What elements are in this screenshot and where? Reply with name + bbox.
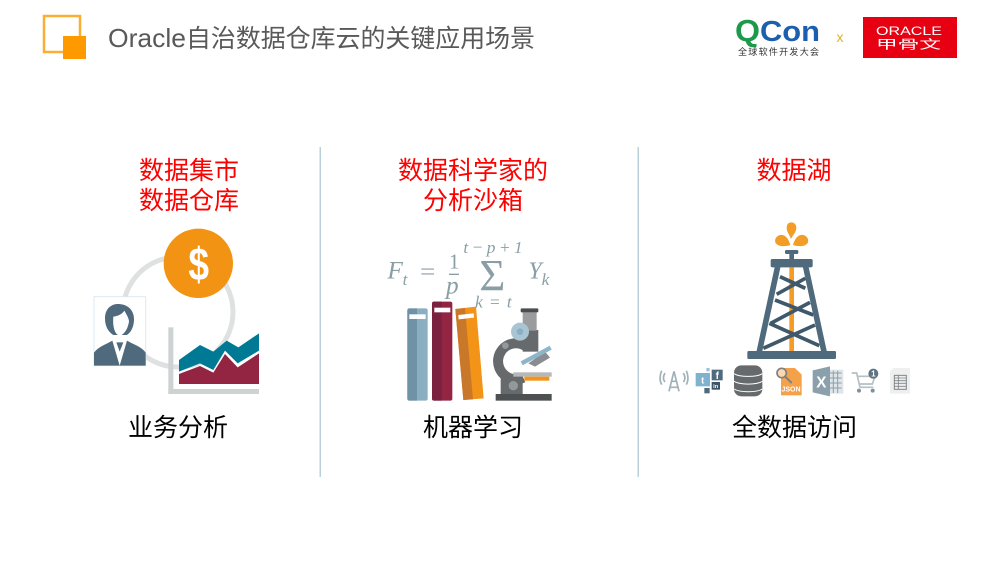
divider: [638, 147, 639, 477]
icon: signal tower: [660, 371, 688, 391]
coin: $: [188, 238, 209, 290]
formula: k = t: [475, 292, 513, 311]
heading: data scientist sandbox: 数据科学家的: [398, 157, 548, 185]
formula: p: [444, 272, 459, 300]
heading: data scientist sandbox: 分析沙箱: [423, 187, 523, 215]
icon: social media: [696, 368, 723, 393]
divider: [320, 147, 321, 477]
formula: F: [386, 256, 403, 284]
formula: k: [542, 270, 550, 289]
formula: Σ: [479, 251, 505, 300]
icon: JSON file: [777, 368, 802, 395]
icon: oil derrick: [747, 222, 836, 359]
logo: QCon: Con: [760, 16, 820, 48]
icon: analytics cycle: [94, 229, 259, 394]
label: full data access: 全数据访问: [732, 414, 857, 442]
oil drops: [775, 222, 808, 246]
person portrait: [94, 297, 146, 366]
logo: Oracle: 甲骨文: [876, 36, 941, 52]
derrick tower: [747, 250, 836, 359]
icon: social media: in: [713, 384, 719, 390]
icon: social media: t: [701, 375, 704, 385]
icon: header squares: [44, 16, 86, 59]
multiplication sign: x: [836, 29, 844, 45]
icon: Excel file: X: [816, 374, 827, 391]
panel: data science sandbox: [386, 157, 552, 442]
logo: Oracle: ORACLE: [876, 26, 942, 38]
panel: business analytics: [94, 157, 259, 442]
microscope: [496, 308, 552, 401]
icon: social media: f: [716, 371, 720, 382]
icon row: data sources: [660, 365, 910, 396]
area chart: [168, 327, 259, 394]
panel: data lake: [660, 157, 910, 442]
icon: shopping cart: 1: [871, 370, 876, 379]
label: machine learning: 机器学习: [423, 414, 523, 442]
logo: QCon: Q: [735, 13, 760, 48]
icon: spreadsheet document: [890, 368, 910, 394]
icon: JSON file: JSON: [781, 386, 801, 393]
logo: QCon: 全球软件开发大会: [738, 46, 819, 57]
formula: 1: [449, 251, 459, 273]
logo: Oracle: [863, 17, 957, 58]
formula: t: [403, 270, 409, 289]
heading: data mart and warehouse: 数据仓库: [139, 187, 239, 215]
coin: [164, 229, 233, 298]
icon: database: [734, 365, 762, 396]
formula: t − p + 1: [463, 238, 523, 257]
formula: [386, 238, 550, 311]
heading: data lake: 数据湖: [756, 157, 832, 185]
logo: QCon: [735, 13, 820, 57]
heading: data mart and warehouse: 数据集市: [139, 157, 239, 185]
icon: shopping cart: [852, 369, 878, 393]
title: 自治数据仓库云的关键应用场景: [186, 25, 535, 53]
title: Oracle: [108, 23, 186, 53]
formula: =: [420, 259, 435, 285]
icon: formula, books and microscope: [386, 238, 552, 401]
label: business analysis: 业务分析: [128, 414, 228, 442]
formula: Y: [528, 258, 544, 284]
books: [407, 302, 484, 401]
icon: Excel file: [813, 366, 843, 396]
